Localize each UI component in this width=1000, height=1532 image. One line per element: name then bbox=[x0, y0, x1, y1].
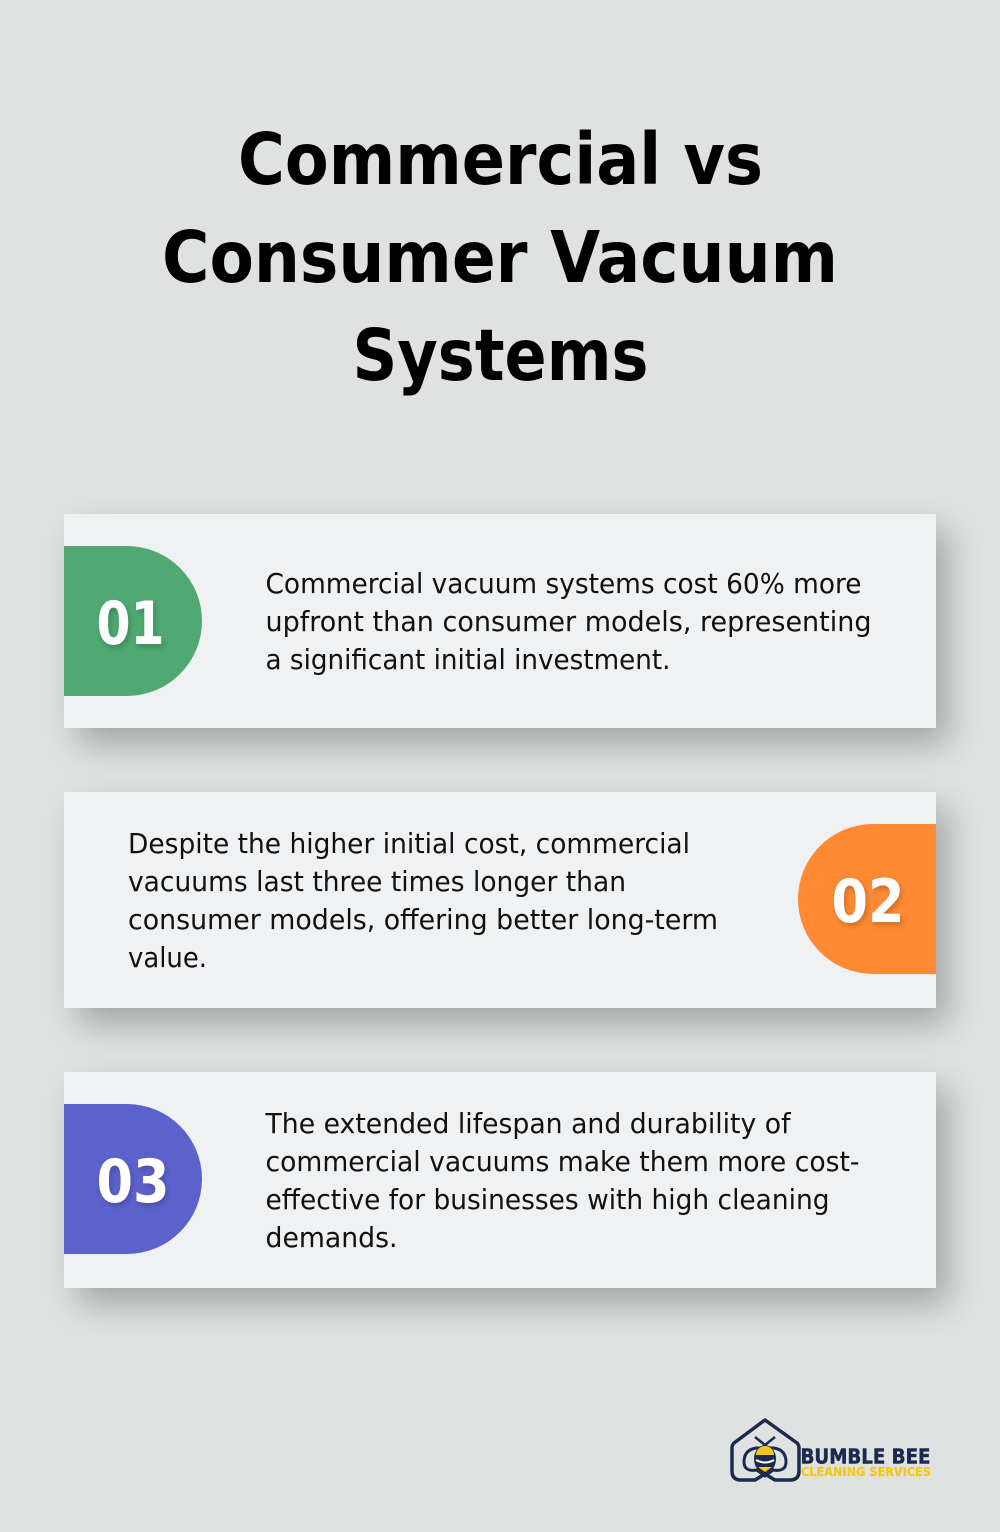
text: card 02 body: consumer models, offering better long-term bbox=[128, 903, 718, 936]
badge: 02 bbox=[798, 824, 936, 974]
text: card 03 body bbox=[265, 1107, 860, 1254]
panel: card 03 bbox=[64, 1072, 948, 1304]
text: card 01 body: upfront than consumer models, representing bbox=[266, 605, 872, 638]
logo: Bumble Bee Cleaning Services bbox=[732, 1420, 931, 1480]
badge: 02: 02 bbox=[832, 867, 904, 937]
title: Systems bbox=[352, 314, 648, 397]
text: card 02 body bbox=[128, 827, 718, 974]
text: card 02 body: Despite the higher initial cost, commercial bbox=[128, 827, 690, 860]
text: card 03 body: effective for businesses with high cleaning bbox=[266, 1183, 830, 1216]
badge: 01: 01 bbox=[96, 589, 164, 659]
icon: house with bee bbox=[732, 1420, 799, 1480]
badge: 03: 03 bbox=[96, 1147, 170, 1217]
text: card 03 body: The extended lifespan and durability of bbox=[265, 1107, 792, 1140]
text: card 02 body: vacuums last three times longer than bbox=[128, 865, 626, 898]
badge: 03 bbox=[64, 1104, 202, 1254]
panel: card 02 bbox=[64, 792, 948, 1024]
title: Consumer Vacuum bbox=[162, 216, 838, 299]
text: card 01 body: a significant initial investment. bbox=[266, 643, 670, 676]
text: logo wordmark: CLEANING SERVICES bbox=[801, 1464, 931, 1479]
text: logo wordmark bbox=[800, 1444, 931, 1479]
badge: 01 bbox=[64, 546, 202, 696]
panel: card 01 bbox=[64, 514, 948, 744]
text: card 03 body: demands. bbox=[266, 1221, 398, 1254]
text: card 03 body: commercial vacuums make them more cost- bbox=[266, 1145, 860, 1178]
text: logo wordmark: BUMBLE BEE bbox=[800, 1444, 930, 1468]
text: card 02 body: value. bbox=[128, 941, 207, 974]
text: card 01 body bbox=[266, 567, 872, 676]
text: card 01 body: Commercial vacuum systems cost 60% more bbox=[266, 567, 862, 600]
title bbox=[162, 118, 838, 397]
title: Commercial vs bbox=[238, 118, 763, 201]
